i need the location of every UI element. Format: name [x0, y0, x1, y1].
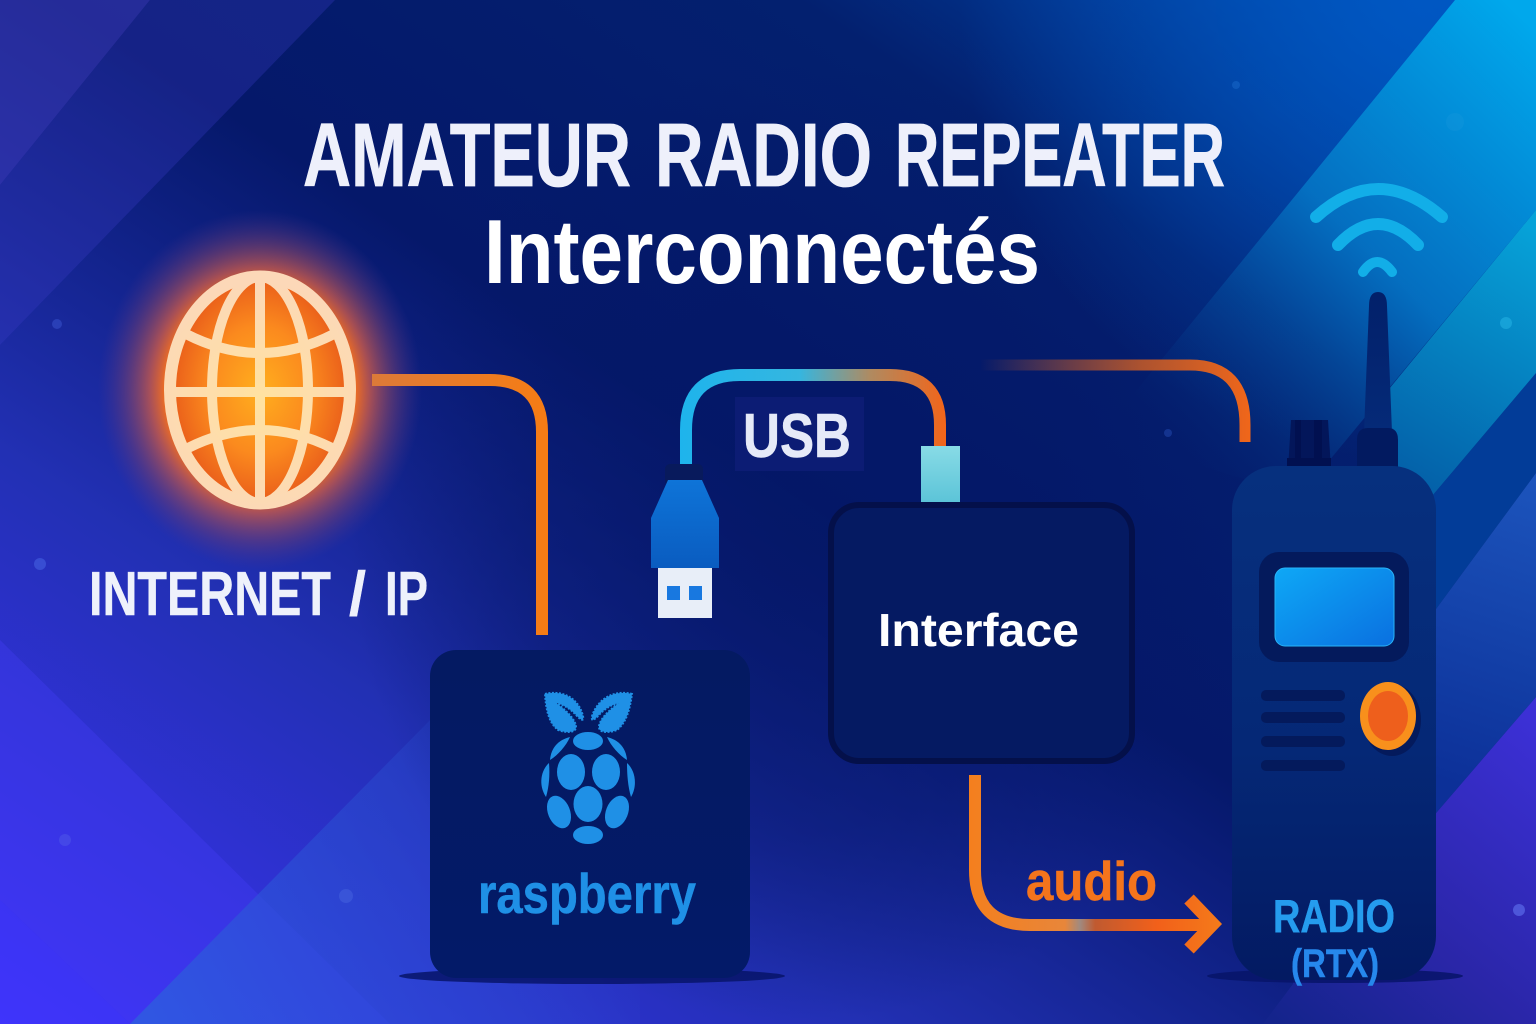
- cable: top link to radio: [980, 365, 1245, 442]
- antenna: [1364, 292, 1392, 432]
- title line 1: REPEATER: [895, 106, 1225, 206]
- label: radio: RADIO: [1273, 890, 1395, 942]
- icon: wifi waves: [1316, 189, 1442, 272]
- label: audio: audio: [1026, 850, 1157, 912]
- label: internet: IP: [385, 560, 428, 629]
- device: radio: [1207, 292, 1463, 986]
- icon: raspberry pi logo: [541, 693, 635, 844]
- title line 1: [303, 106, 1225, 206]
- cable: audio arrow: [975, 775, 1213, 949]
- device: interface: [831, 446, 1132, 761]
- title line 2: Interconnectés: [484, 202, 1040, 303]
- icon: globe: [98, 210, 422, 570]
- label: rtx: (RTX): [1291, 942, 1379, 986]
- icon: usb plug: [651, 464, 719, 618]
- button: [1360, 682, 1421, 756]
- label: internet: /: [349, 560, 366, 629]
- title: [303, 106, 1225, 303]
- radio body: [1232, 466, 1436, 980]
- label: raspberry: raspberry: [478, 862, 696, 925]
- label: interface: Interface: [878, 604, 1079, 656]
- label: usb: USB: [743, 402, 851, 471]
- device: raspberry: [399, 650, 785, 984]
- knob: [1287, 420, 1331, 470]
- title line 1: RADIO: [655, 106, 872, 206]
- label: internet: INTERNET: [89, 560, 331, 629]
- title line 1: AMATEUR: [303, 106, 631, 206]
- screen: [1259, 552, 1409, 662]
- cable: usb: [686, 375, 940, 466]
- speaker lines: [1261, 690, 1345, 771]
- cable: internet to raspberry: [372, 380, 542, 635]
